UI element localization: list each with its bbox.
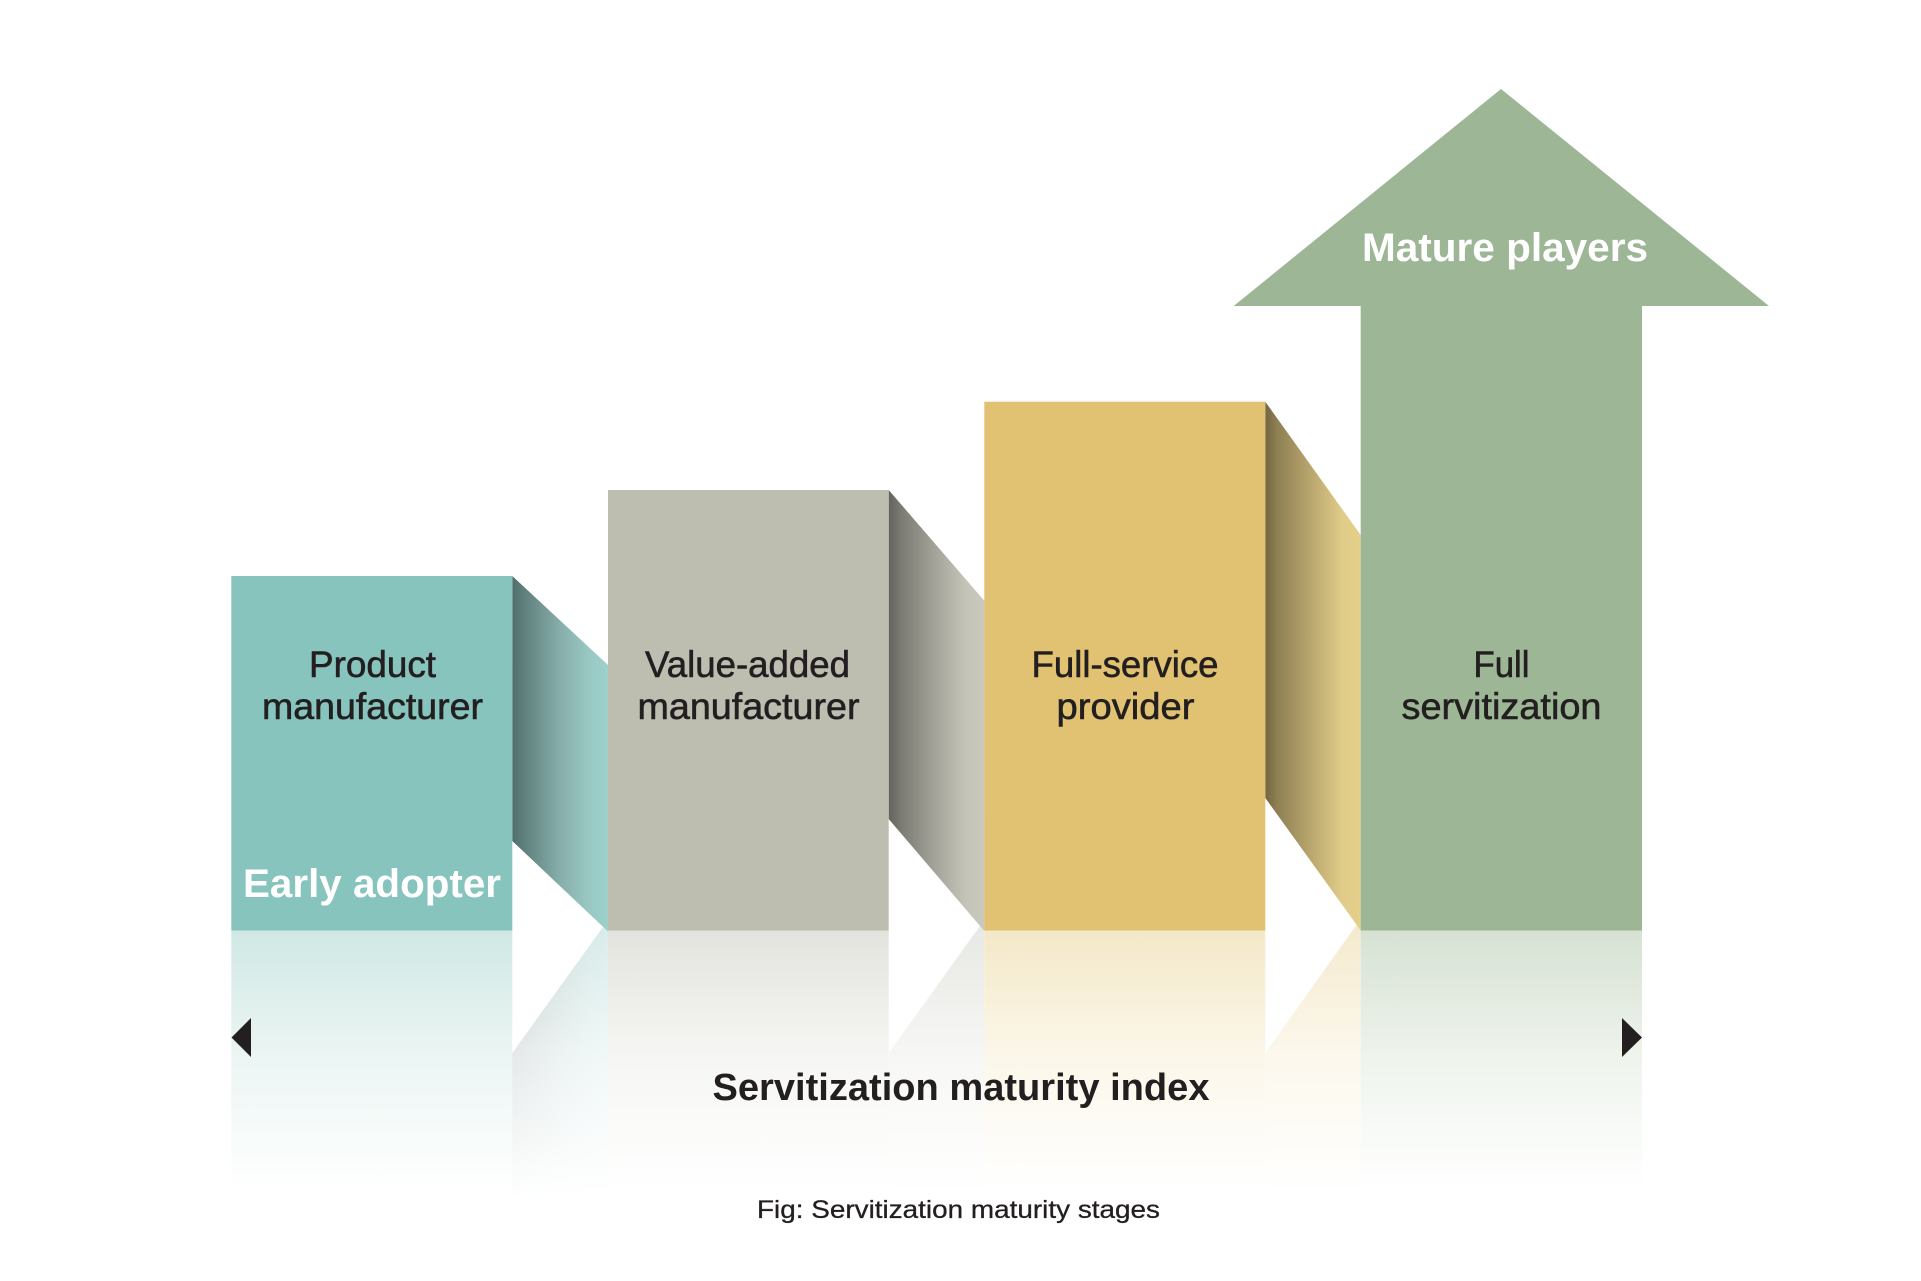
panel: full servitization stage arrow [1234, 89, 1769, 930]
fold connector: gold to green [1265, 402, 1361, 930]
axis label: servitization maturity index: Servitization maturity index [712, 1067, 1210, 1109]
panel: value-added manufacturer stage [608, 490, 984, 931]
gold bar [984, 402, 1265, 930]
infographic: servitization maturity stages [231, 89, 1769, 1224]
teal bar [231, 576, 512, 930]
label: value-added manufacturer: manufacturer [638, 686, 860, 727]
green up arrow [1234, 89, 1769, 930]
panel: full-service provider stage [984, 402, 1361, 930]
fold connector: teal to grey [512, 576, 608, 932]
label: early adopter: Early adopter [243, 862, 501, 906]
label: product manufacturer: Product [309, 644, 437, 685]
caption: Fig: Servitization maturity stages [757, 1196, 1160, 1224]
label: full servitization: servitization [1402, 686, 1602, 727]
label: mature players: Mature players [1362, 226, 1648, 270]
label: value-added manufacturer: Value-added [645, 644, 850, 685]
icon: right arrowhead [1622, 1018, 1642, 1057]
label: full-service provider: provider [1056, 686, 1194, 727]
label: full-service provider: Full-service [1032, 644, 1218, 685]
fold connector: grey to gold [889, 490, 984, 931]
label: full servitization: Full [1474, 644, 1530, 685]
reflection: stage bars fading below the baseline [231, 919, 1642, 1200]
label: product manufacturer: manufacturer [262, 686, 483, 727]
panel: product manufacturer stage [231, 576, 608, 932]
grey bar [608, 490, 889, 930]
icon: left arrowhead [232, 1018, 251, 1057]
